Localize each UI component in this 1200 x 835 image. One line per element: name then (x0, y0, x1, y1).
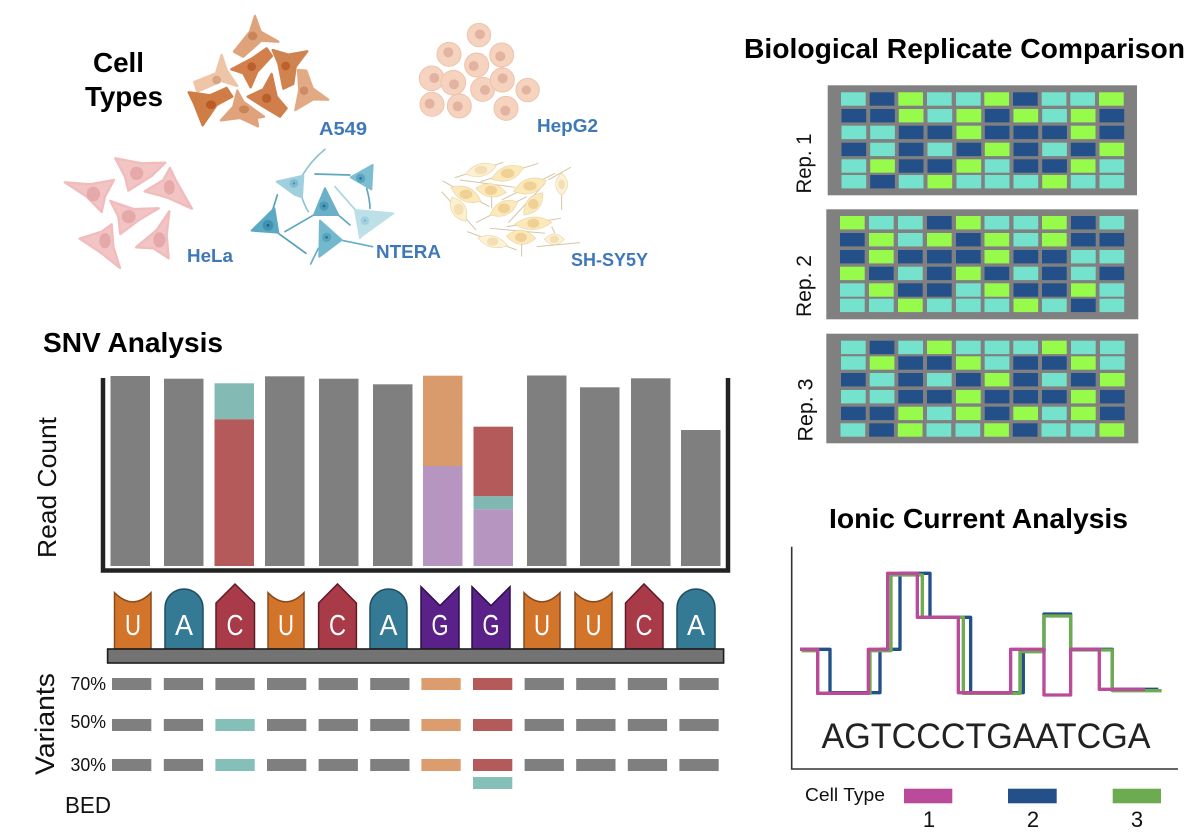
label: HeLa: HeLa (187, 246, 234, 266)
heading: SNV Analysis: SNV Analysis (43, 327, 223, 358)
chart: ionic current traces (792, 547, 1178, 769)
icon: SH-SY5Y cell cluster (442, 160, 580, 257)
label: HepG2: HepG2 (537, 116, 598, 136)
base: A: A (687, 610, 706, 642)
base: A (370, 589, 407, 649)
trace: cell type 1 (800, 573, 1145, 695)
base: C: C (226, 610, 244, 642)
variant row: 50%: 50% (70, 712, 106, 732)
sequence backbone bar (108, 649, 724, 663)
icon: A549 cell cluster (189, 16, 328, 126)
legend: cell type (805, 785, 1161, 832)
chart axes (103, 378, 728, 570)
base: C: C (636, 610, 652, 642)
panel: replicate 3 heatmap (794, 334, 1138, 443)
base: C (319, 584, 356, 649)
heading: Ionic Current Analysis: Ionic Current Analysis (829, 503, 1128, 534)
base: A (165, 589, 203, 649)
base: U (268, 593, 304, 649)
RNA sequence track (108, 584, 724, 663)
label: Rep. 3: Rep. 3 (794, 378, 818, 442)
icon: HeLa cell cluster (65, 158, 192, 268)
label: NTERA: NTERA (376, 242, 441, 262)
legend: cell type: Cell Type (805, 785, 885, 805)
legend: cell type: 2 (1027, 807, 1039, 832)
variant row: 30% (70, 755, 719, 789)
panel: replicate 2 heatmap (793, 209, 1138, 319)
base: U (114, 593, 151, 649)
base: G (421, 587, 459, 649)
base: G (472, 587, 510, 649)
heading: Cell Types: Types (85, 81, 163, 112)
icon: HepG2 cell cluster (419, 23, 539, 120)
label: Variants axis: Variants (30, 673, 60, 775)
variant row: 50% (70, 712, 719, 732)
heading: Cell Types (85, 47, 163, 112)
base: G: G (482, 610, 500, 642)
label: Rep. 2: Rep. 2 (793, 255, 816, 317)
base: U (524, 593, 560, 649)
base: A (677, 589, 715, 649)
variant row: 70%: 70% (70, 674, 106, 694)
base: A: A (175, 610, 194, 642)
variant row: 30%: 30% (70, 755, 106, 775)
base: U: U (586, 610, 602, 642)
sequence label: AGTCCCTGAATCGA (822, 717, 1151, 756)
label: Rep. 1: Rep. 1 (793, 134, 816, 194)
base: G: G (432, 610, 448, 642)
bar chart: read count (103, 376, 728, 570)
panel: replicate 1 heatmap (793, 85, 1137, 195)
chart axes (792, 547, 1178, 769)
label: Read Count axis: Read Count (32, 416, 62, 558)
label: SH-SY5Y: SH-SY5Y (571, 250, 648, 270)
heading: Cell Types: Cell (93, 47, 144, 78)
base: U (575, 593, 612, 649)
base: U: U (278, 610, 294, 642)
base: U: U (534, 610, 550, 642)
label: BED: BED (65, 792, 111, 818)
base: C (626, 584, 663, 649)
icon: NTERA cell cluster (252, 149, 393, 264)
base: C: C (329, 610, 346, 642)
legend: cell type: 3 (1131, 807, 1143, 832)
heading: Biological Replicate Comparison: Biological Replicate Comparison (744, 33, 1185, 64)
base: U: U (125, 610, 141, 642)
variant row: 70% (70, 674, 719, 694)
trace: cell type 3 (802, 575, 1162, 693)
legend: cell type: 1 (923, 807, 935, 832)
trace: cell type 2 (800, 573, 1158, 693)
base: A: A (380, 610, 398, 642)
base: C (216, 584, 254, 649)
label: A549: A549 (319, 119, 367, 139)
